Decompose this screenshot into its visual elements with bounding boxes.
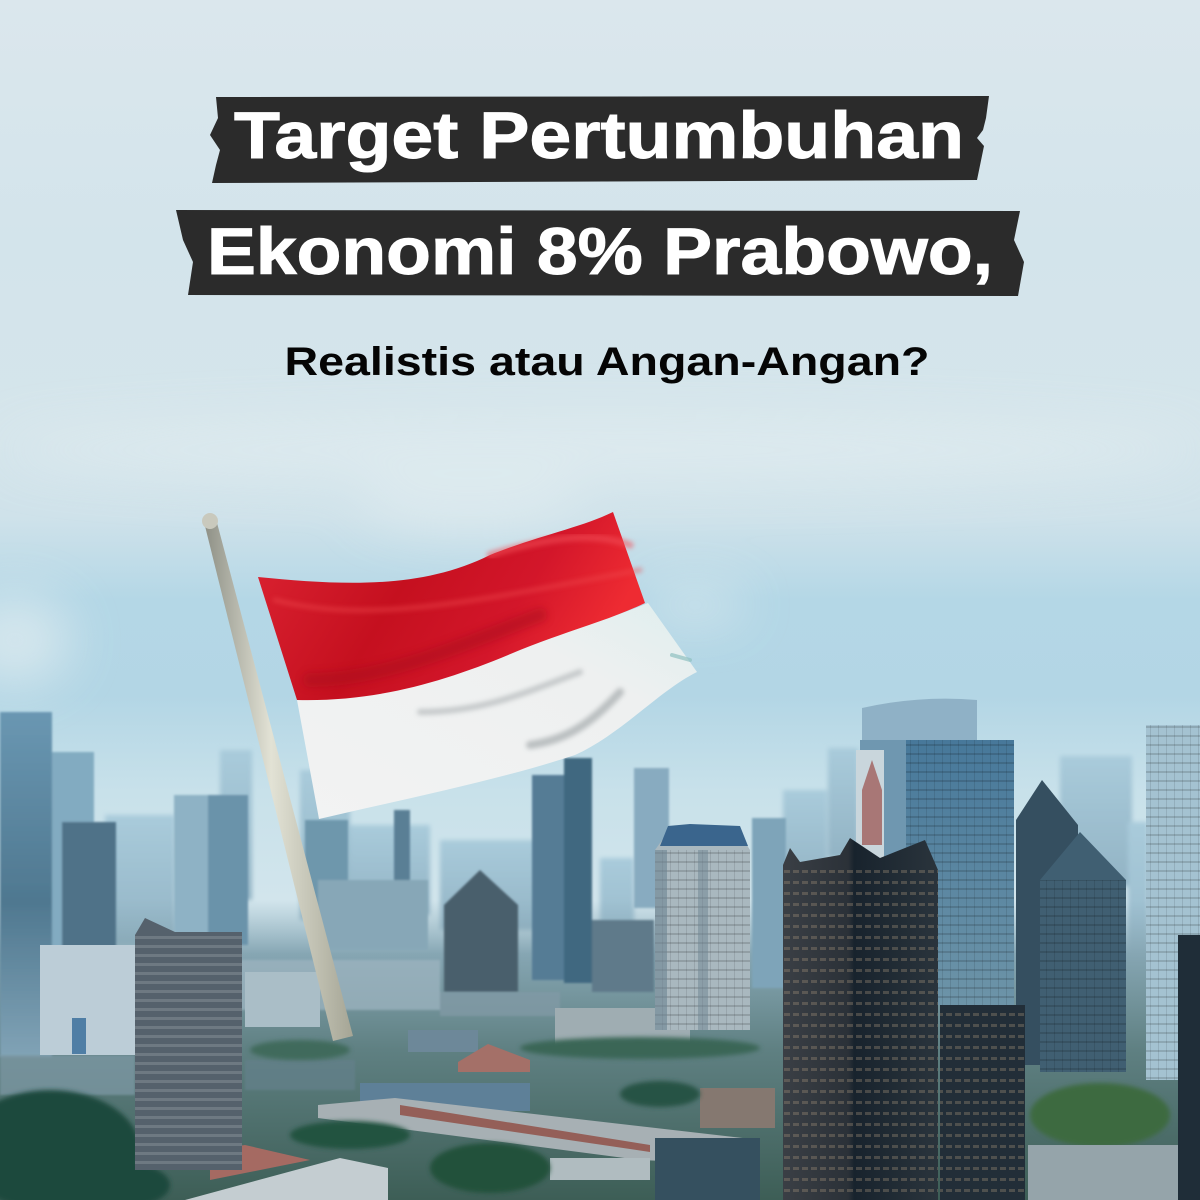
title tape line 2: Ekonomi 8% Prabowo, <box>207 214 993 288</box>
ground and low city <box>0 900 1200 1200</box>
flag white stripe <box>297 603 697 819</box>
foreground towers <box>135 699 1200 1200</box>
flag folds <box>275 538 690 745</box>
flag <box>258 512 697 819</box>
tower: far right pale <box>1146 725 1200 1200</box>
clouds <box>0 418 1200 685</box>
tower: left grey <box>135 918 242 1170</box>
subtitle: Realistis atau Angan-Angan? <box>284 340 930 384</box>
tower: hexagonal dark centre <box>444 870 518 992</box>
low rise buildings <box>40 945 775 1200</box>
low city texture <box>0 960 560 1095</box>
tower: far left <box>0 712 52 1057</box>
flag red stripe <box>258 512 645 700</box>
distant skyline <box>105 748 1148 1022</box>
tower: glass with cylinder top <box>856 699 1014 1005</box>
title tape line 1: Target Pertumbuhan <box>234 98 964 172</box>
mid-distance towers <box>0 712 786 1057</box>
tower: centre beige <box>655 824 750 1030</box>
title tape line 1 <box>210 96 989 183</box>
roof building lower right <box>1028 1145 1178 1200</box>
flag pole <box>202 513 353 1041</box>
tower: dark lower right <box>940 1005 1025 1200</box>
tower: right dark stepped <box>1016 780 1126 1072</box>
trees <box>0 1037 1170 1200</box>
tower: main dark foreground <box>783 838 938 1200</box>
